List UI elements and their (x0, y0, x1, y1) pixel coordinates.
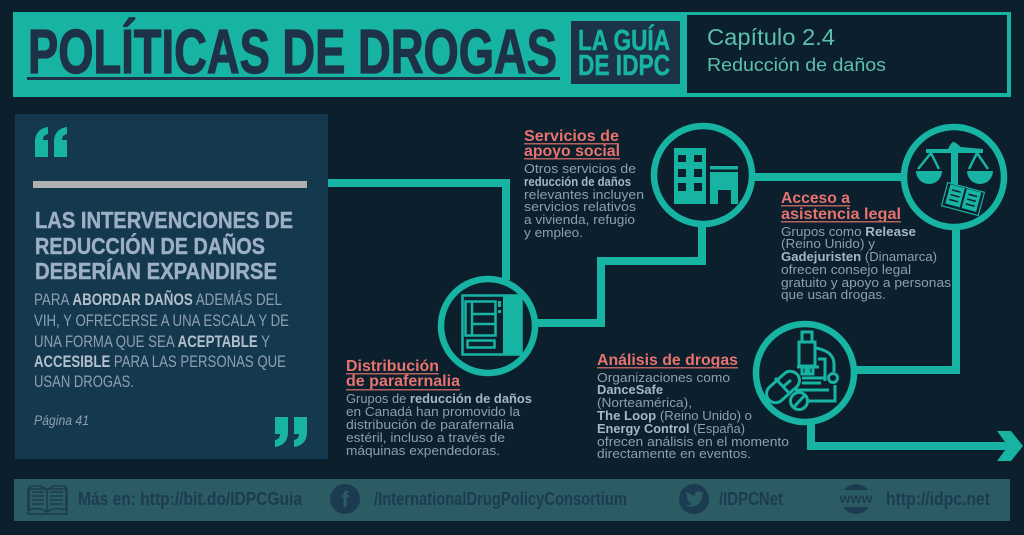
text block: distribución de parafernalia: distribución de parafernalia (346, 417, 515, 432)
text block: servicios de apoyo social: relevantes incluyen (524, 187, 644, 202)
quote body: USAN DROGAS. (34, 373, 134, 391)
icon: vending machine (441, 279, 535, 373)
panel: footer links (14, 479, 1010, 521)
divider bar (33, 181, 307, 188)
text block: acceso a asistencia legal: Acceso a (781, 190, 850, 207)
text block: servicios de apoyo social: Otros servicios de (524, 161, 636, 176)
text block: análisis de drogas: (Norteamérica), (597, 395, 692, 410)
text block: distribución de parafernalia: Grupos de reducción de daños (346, 391, 532, 406)
icon: opening quote (35, 127, 67, 157)
link: facebook: /InternationalDrugPolicyConsortium (374, 489, 627, 509)
text block: distribución de parafernalia: de parafernalia (346, 373, 460, 390)
badge: la guía de IDPC (571, 21, 680, 84)
text block: distribución de parafernalia: en Canadá han promovido la (346, 404, 521, 419)
connector path with arrow (328, 177, 1023, 461)
text block: servicios de apoyo social: a vivienda, refugio (524, 212, 635, 227)
text block: análisis de drogas: The Loop (Reino Unido) o (597, 408, 752, 423)
text block: análisis de drogas: Energy Control (España) (597, 421, 745, 436)
text block: acceso a asistencia legal (781, 190, 952, 302)
text block: distribución de parafernalia: estéril, incluso a través de (346, 430, 505, 445)
text block: servicios de apoyo social: servicios relativos (524, 199, 637, 214)
badge: la guía de IDPC: DE IDPC (578, 50, 670, 82)
icon: microscope with pills (756, 324, 854, 422)
badge: la guía de IDPC: LA GUÍA (578, 23, 670, 57)
text block: servicios de apoyo social: y empleo. (524, 225, 583, 240)
text block: análisis de drogas: ofrecen análisis en el momento (597, 434, 789, 449)
text block: acceso a asistencia legal: que usan drogas. (781, 287, 886, 302)
icon: buildings (654, 126, 752, 224)
text block: servicios de apoyo social: Servicios de (524, 128, 619, 145)
text block: distribución de parafernalia: máquinas expendedoras. (346, 443, 500, 458)
link: twitter: /IDPCNet (719, 489, 783, 509)
text block: acceso a asistencia legal: gratuito y apoyo a personas (781, 275, 952, 290)
icon: open book (28, 486, 67, 514)
text block: servicios de apoyo social: reducción de daños (524, 174, 631, 189)
chapter box: Capítulo 2.4 (707, 24, 835, 50)
text block: acceso a asistencia legal: ofrecen consejo legal (781, 262, 911, 277)
text block: servicios de apoyo social: apoyo social (524, 143, 620, 160)
icon: facebook: f (341, 487, 349, 512)
text block: análisis de drogas: Organizaciones como (597, 370, 730, 385)
quote body: VIH, Y OFRECERSE A UNA ESCALA Y DE (34, 312, 289, 330)
icon: www globe: www (838, 490, 873, 506)
icon: twitter (679, 484, 709, 514)
text block: distribución de parafernalia: Distribución (346, 358, 439, 375)
icon: facebook (330, 484, 360, 514)
quote heading: DEBERÍAN EXPANDIRSE (35, 257, 277, 284)
icon: www globe (838, 484, 874, 514)
text block: acceso a asistencia legal: asistencia legal (781, 206, 901, 223)
text block: acceso a asistencia legal: (Reino Unido) y (781, 236, 876, 251)
panel: quote (15, 114, 328, 459)
text block: análisis de drogas: DanceSafe (597, 382, 663, 397)
quote body: PARA ABORDAR DAÑOS ADEMÁS DEL (34, 289, 282, 309)
text block: acceso a asistencia legal: Grupos como Release (781, 224, 916, 239)
text block: distribución de parafernalia (346, 358, 532, 458)
link: website: http://idpc.net (886, 489, 990, 509)
chapter box (687, 15, 1007, 93)
quote body: ACCESIBLE PARA LAS PERSONAS QUE (34, 353, 286, 371)
text block: servicios de apoyo social (524, 128, 644, 240)
text block: análisis de drogas: Análisis de drogas (597, 352, 738, 369)
panel: header banner (13, 12, 1011, 97)
text block: análisis de drogas: directamente en eventos. (597, 446, 751, 461)
title: POLÍTICAS DE DROGAS (28, 18, 557, 87)
quote heading (35, 207, 293, 284)
quote body (34, 289, 289, 391)
icon: closing quote (275, 417, 307, 447)
text block: análisis de drogas (597, 352, 789, 461)
quote heading: LAS INTERVENCIONES DE (35, 207, 293, 233)
page reference: Página 41 (34, 412, 89, 428)
quote body: UNA FORMA QUE SEA ACEPTABLE Y (34, 333, 270, 351)
link: guide: Más en: http://bit.do/IDPCGuia (78, 489, 303, 509)
icon: scales and book (904, 127, 1004, 227)
text block: acceso a asistencia legal: Gadejuristen (Dinamarca) (781, 249, 937, 264)
quote heading: REDUCCIÓN DE DAÑOS (35, 232, 265, 259)
chapter box: Reducción de daños (707, 55, 886, 75)
